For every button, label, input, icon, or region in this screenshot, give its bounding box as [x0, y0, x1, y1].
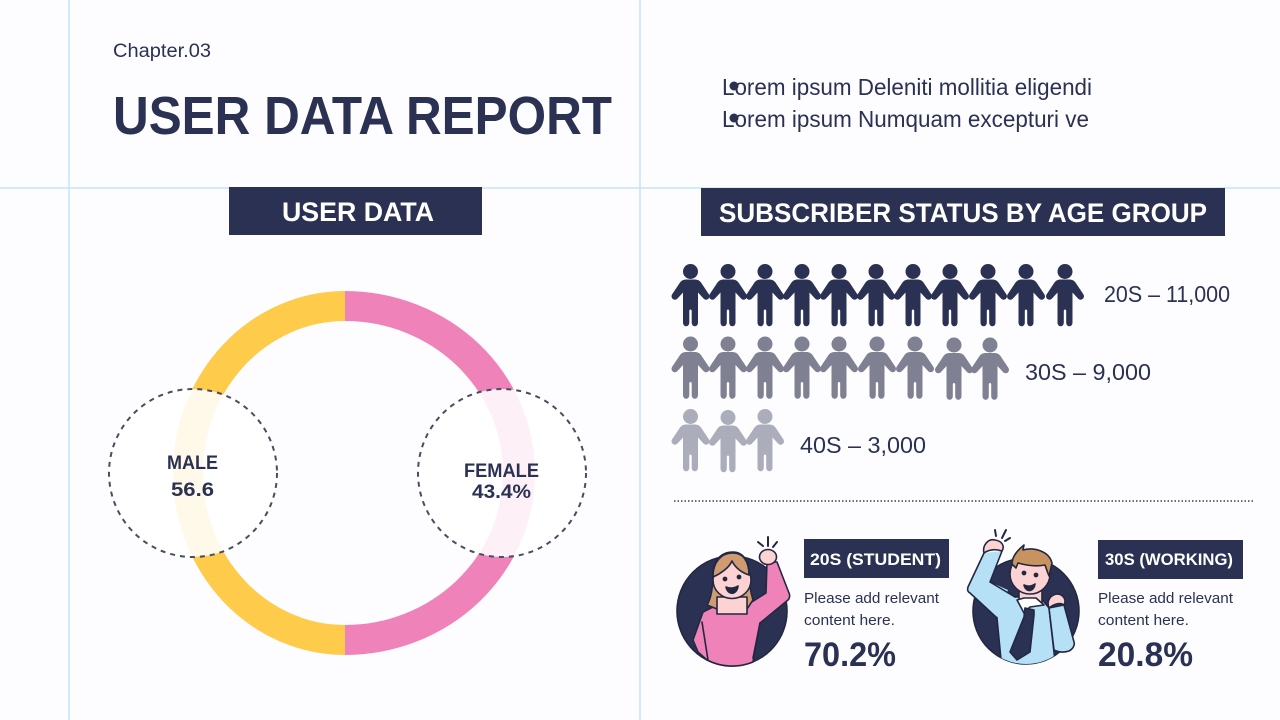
callout: male: MALE	[167, 453, 218, 474]
heading: subscriber status: SUBSCRIBER STATUS BY AGE GROUP	[719, 198, 1207, 228]
heading: user data: USER DATA	[282, 197, 434, 227]
pictogram row: 40s	[672, 409, 784, 472]
chapter label: Chapter.03	[113, 41, 211, 62]
pictogram row: 20s	[672, 264, 1084, 326]
callout: female	[418, 389, 586, 557]
label: 30s count: 30S – 9,000	[1025, 359, 1151, 385]
donut chart: gender split	[109, 291, 586, 655]
text: working description: content here.	[1098, 612, 1189, 629]
stat: student percent: 70.2%	[804, 636, 896, 674]
label: 30s working: 30S (WORKING)	[1105, 550, 1233, 569]
bullet list	[722, 74, 1092, 132]
female arc	[345, 291, 535, 655]
male arc	[173, 291, 345, 655]
label: 40s count: 40S – 3,000	[800, 432, 926, 458]
label: 20s count: 20S – 11,000	[1104, 281, 1230, 307]
label: 30s working	[1098, 540, 1243, 579]
bullet list: Lorem ipsum Deleniti mollitia eligendi	[722, 74, 1092, 100]
callout: male	[109, 389, 277, 557]
text: student description: content here.	[804, 612, 895, 629]
icon: working adult illustration	[968, 530, 1079, 670]
text: working description: Please add relevant	[1098, 590, 1234, 607]
title: USER DATA REPORT	[113, 86, 612, 146]
text: working description	[1098, 590, 1234, 629]
bullet list: Lorem ipsum Numquam excepturi ve	[722, 106, 1089, 132]
heading: subscriber status	[701, 188, 1225, 236]
text: student description	[804, 590, 940, 629]
stat: working percent: 20.8%	[1098, 636, 1193, 674]
label: 20s student	[804, 539, 949, 578]
callout: female: FEMALE	[464, 461, 539, 482]
text: student description: Please add relevant	[804, 590, 940, 607]
heading: user data	[229, 187, 482, 235]
icon: student illustration	[677, 537, 790, 666]
pictogram row: 30s	[672, 336, 1009, 400]
label: 20s student: 20S (STUDENT)	[810, 550, 941, 569]
callout: male: 56.6	[171, 480, 214, 501]
callout: female: 43.4%	[472, 482, 531, 503]
